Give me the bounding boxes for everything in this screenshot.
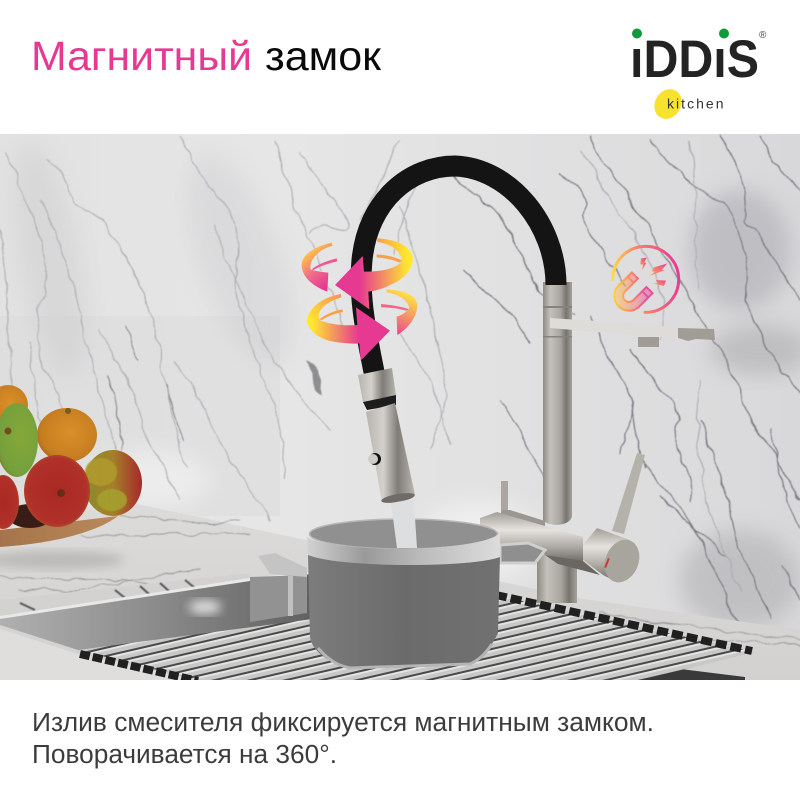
pull-out spray head: [358, 368, 415, 505]
description text: Излив смесителя фиксируется магнитным замком.: [32, 709, 654, 737]
upper-right ring segment: [377, 238, 413, 264]
lower inner tapers: [319, 309, 343, 320]
left veins: [0, 136, 400, 520]
title: [31, 33, 382, 79]
fruit bowl with mangoes: [0, 385, 142, 547]
faucet mixer body with side lever: [480, 453, 646, 603]
description text: [32, 709, 654, 769]
logo: IDDIS kitchen: kitchen: [667, 96, 725, 112]
marble wall: [0, 134, 800, 680]
horseshoe magnet: [608, 272, 653, 317]
logo: IDDIS kitchen: [630, 28, 767, 124]
cooking pot: [258, 518, 545, 668]
upper inner tapers: [312, 258, 337, 270]
marble countertop: [0, 500, 800, 680]
lower-right ring segment: [387, 289, 417, 335]
magnet icon: [608, 246, 679, 317]
sparks: [640, 258, 667, 286]
photo: kitchen faucet scene: [0, 134, 800, 681]
ring: [613, 246, 679, 312]
stainless sink basin: [0, 571, 745, 680]
title: Магнитный: [31, 33, 252, 79]
black flexible hose spout: [361, 166, 556, 372]
logo: IDDIS kitchen: ıDDıS: [630, 30, 759, 89]
lower-left ring segment: [307, 294, 341, 322]
upper arrow pointing left: [335, 256, 413, 309]
description text: Поворачивается на 360°.: [32, 741, 337, 769]
logo: IDDIS kitchen: ®: [759, 30, 767, 41]
rotation arrows icon: [302, 238, 417, 361]
mat back caps and rods: [78, 595, 755, 681]
water stream: [392, 500, 414, 518]
faucet column and filter lever: [543, 282, 715, 525]
title: замок: [265, 33, 382, 79]
right veins: [430, 135, 800, 625]
lower arrow pointing right: [307, 307, 390, 361]
upper-left ring segment: [302, 243, 332, 292]
